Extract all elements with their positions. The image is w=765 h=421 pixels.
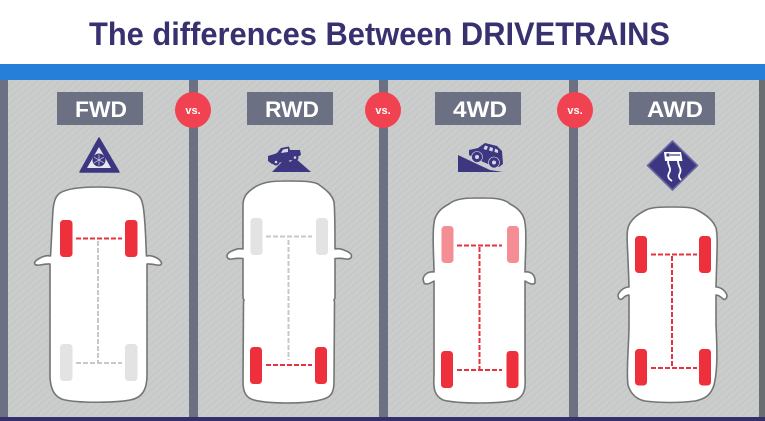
vs badge 3: vs. [567,105,583,117]
heading: 4WD [435,92,521,125]
car: FWD top view [34,187,162,402]
driveshaft and axles [76,238,122,363]
icon: truck on rocks [268,146,311,172]
heading: FWD: FWD [75,97,127,122]
divider column: far right [759,80,765,417]
vs badge 1: vs. [185,105,201,117]
heading: 4WD: 4WD [453,97,507,122]
car: AWD top view [618,207,727,402]
heading: RWD: RWD [265,97,319,122]
car: RWD top view [227,181,352,403]
vs badge 1 [175,92,211,128]
wheels: front automatic [442,226,519,263]
vs badge 2: vs. [375,105,391,117]
icon: jeep on slope [458,143,503,172]
car: 4WD top view [423,198,535,403]
driveshaft and axles [266,236,312,365]
wheels: front unpowered [250,218,328,255]
bottom navy bar [0,417,765,421]
icon: slippery road diamond [648,141,698,190]
panel: FWD [8,80,189,417]
divider column: FWD and RWD [189,80,198,417]
divider column: RWD and 4WD [379,80,388,417]
wheels: rear powered [441,351,518,388]
wheels: front powered [60,220,138,257]
heading: FWD [57,92,143,125]
vs badge 3 [557,92,593,128]
driveshaft and axles [651,254,697,368]
heading: AWD: AWD [647,97,703,122]
divider column: far left [0,80,8,417]
panel: 4WD [388,80,569,417]
wheels: rear unpowered [60,344,138,381]
panel: AWD [578,80,759,417]
heading: AWD [629,92,715,125]
title: The differences Between DRIVETRAINS [89,16,670,52]
vs badge 2 [365,92,401,128]
panel: RWD [198,80,379,417]
wheels: front powered [635,236,711,273]
blue header bar [0,64,765,80]
wheels: rear powered [635,349,711,386]
heading: RWD [247,92,333,125]
icon: snow warning triangle [80,138,119,172]
wheels: rear powered [250,347,327,384]
driveshaft and axles [457,246,502,370]
divider column: 4WD and AWD [569,80,578,417]
